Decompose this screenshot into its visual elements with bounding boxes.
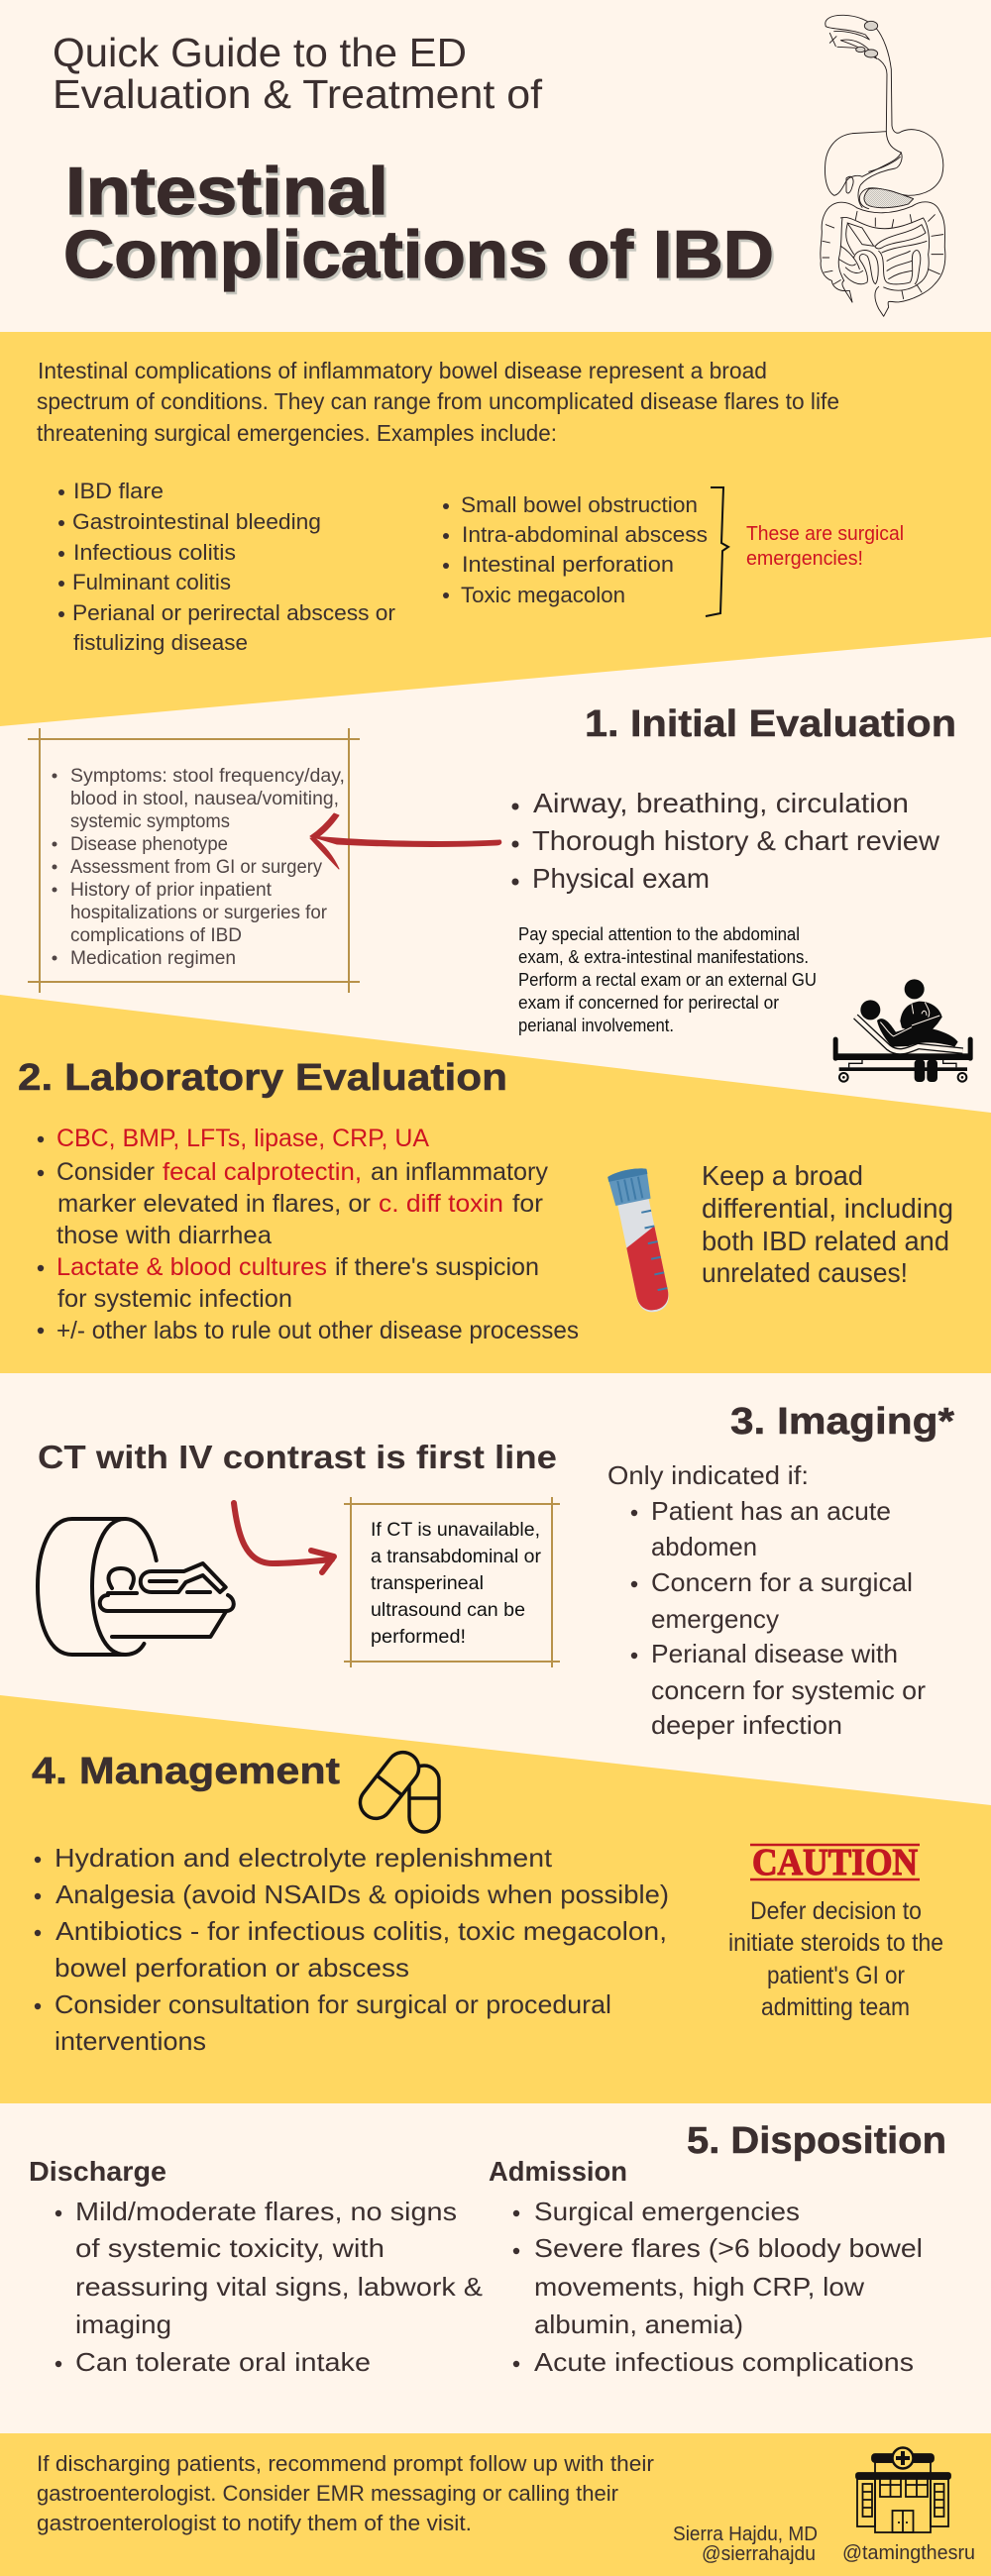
list: surgical emergencies: Toxic megacolon <box>461 583 625 607</box>
arrow <box>234 1503 334 1572</box>
list: labs: +/- other labs to rule out other disease processes <box>56 1317 579 1344</box>
list: management: Analgesia (avoid NSAIDs & opioids when possible) <box>55 1879 669 1909</box>
icon: hospital <box>856 2447 950 2532</box>
note: physical exam <box>518 924 817 1035</box>
list: surgical emergencies <box>443 492 708 607</box>
author credit <box>673 2523 818 2565</box>
alternative box: If CT is unavailable, <box>371 1519 540 1541</box>
list: labs <box>38 1125 579 1344</box>
note: physical exam: Pay special attention to the abdominal <box>518 924 800 944</box>
callout: broad differential: Keep a broad <box>702 1160 863 1191</box>
list: management: Consider consultation for surgical or procedural <box>55 1989 611 2019</box>
callout: broad differential: differential, including <box>702 1193 953 1224</box>
alternative box: performed! <box>371 1626 466 1648</box>
column: admission: Admission <box>489 2156 627 2187</box>
follow-up note: gastroenterologist. Consider EMR messaging or calling their <box>37 2481 618 2506</box>
list: imaging indications: emergency <box>651 1604 779 1634</box>
list: labs: marker elevated in flares, or <box>57 1190 371 1218</box>
list: labs: those with diarrhea <box>56 1222 272 1249</box>
list: management: Antibiotics - for infectious colitis, toxic megacolon, <box>55 1916 667 1946</box>
list: complications: Perianal or perirectal abscess or <box>72 600 395 625</box>
intro paragraph: Intestinal complications of inflammatory bowel disease represent a broad <box>38 358 767 383</box>
alternative box: ultrasound can be <box>371 1599 525 1621</box>
column: admission: Acute infectious complications <box>534 2347 914 2377</box>
list: labs: an inflammatory <box>371 1158 548 1186</box>
callout: caution: patient's GI or <box>767 1962 905 1989</box>
list: surgical emergencies: Intestinal perforation <box>462 552 674 577</box>
list: evaluation steps: Physical exam <box>532 863 710 894</box>
list: evaluation steps: Airway, breathing, circulation <box>533 788 909 818</box>
heading: 3. Imaging* <box>730 1401 954 1443</box>
list: complications: Fulminant colitis <box>72 570 231 594</box>
panel: initial evaluation <box>28 703 973 1082</box>
callout: surgical emergencies: emergencies! <box>746 548 863 570</box>
panel: imaging <box>38 1401 954 1740</box>
callout: caution: CAUTION <box>752 1842 918 1883</box>
history box: Disease phenotype <box>70 834 228 855</box>
intro paragraph: threatening surgical emergencies. Examples include: <box>37 420 557 446</box>
callout: caution: initiate steroids to the <box>728 1929 943 1957</box>
list: evaluation steps <box>511 788 940 894</box>
main title <box>63 154 774 292</box>
panel: footer <box>37 2447 975 2565</box>
list: labs: c. diff toxin <box>379 1190 503 1218</box>
callout: surgical emergencies <box>746 523 904 570</box>
panel: management <box>32 1746 943 2056</box>
history box: Medication regimen <box>70 948 236 969</box>
icon: doctor and patient <box>833 979 973 1082</box>
heading: 4. Management <box>32 1751 340 1792</box>
history box: blood in stool, nausea/vomiting, <box>70 789 339 809</box>
subtitle: Quick Guide to the ED <box>53 30 467 75</box>
callout: broad differential: unrelated causes! <box>702 1257 908 1288</box>
history box: hospitalizations or surgeries for <box>70 903 328 923</box>
list: management: Hydration and electrolyte replenishment <box>55 1843 553 1873</box>
callout: broad differential <box>702 1160 953 1288</box>
alternative box <box>344 1497 560 1667</box>
note: physical exam: Perform a rectal exam or an external GU <box>518 970 817 990</box>
column: discharge: imaging <box>75 2309 171 2339</box>
icon: pills <box>354 1746 439 1832</box>
list: complications: IBD flare <box>73 479 164 503</box>
column: admission <box>489 2156 923 2377</box>
panel: disposition <box>29 2120 946 2377</box>
column: admission: movements, high CRP, low <box>534 2272 864 2302</box>
list: labs: CBC, BMP, LFTs, lipase, CRP, UA <box>56 1125 429 1152</box>
icon: digestive system <box>821 15 945 316</box>
column: discharge: Can tolerate oral intake <box>75 2347 371 2377</box>
main title: Intestinal <box>65 154 388 229</box>
intro paragraph: spectrum of conditions. They can range from uncomplicated disease flares to life <box>37 388 839 414</box>
list: imaging indications: Only indicated if: <box>607 1460 809 1490</box>
list: labs: Consider <box>56 1158 155 1186</box>
author credit: @sierrahajdu <box>702 2543 816 2565</box>
list: imaging indications: Concern for a surgical <box>651 1567 913 1597</box>
intro paragraph <box>37 358 839 446</box>
list: management <box>35 1843 669 2056</box>
history box: systemic symptoms <box>70 811 230 832</box>
history box: complications of IBD <box>70 925 242 946</box>
note: physical exam: exam if concerned for perirectal or <box>518 993 779 1013</box>
list: complications <box>58 479 395 655</box>
handle: @tamingthesru <box>842 2542 975 2564</box>
alternative box: a transabdominal or <box>371 1546 541 1567</box>
list: surgical emergencies: Intra-abdominal abscess <box>462 522 708 547</box>
follow-up note <box>37 2451 654 2535</box>
list: imaging indications: Patient has an acute <box>651 1496 891 1526</box>
column: admission: Severe flares (>6 bloody bowel <box>534 2233 923 2263</box>
column: discharge <box>29 2156 483 2377</box>
history box <box>28 728 360 993</box>
subtitle <box>53 30 543 117</box>
subheading: CT first line: CT with IV contrast is first line <box>38 1439 557 1475</box>
history box: Symptoms: stool frequency/day, <box>70 766 345 787</box>
list: imaging indications: concern for systemic or <box>651 1675 926 1705</box>
list: imaging indications: abdomen <box>651 1532 757 1561</box>
callout: caution: Defer decision to <box>750 1897 922 1925</box>
author credit: Sierra Hajdu, MD <box>673 2523 818 2545</box>
list: evaluation steps: Thorough history & chart review <box>532 825 940 856</box>
alternative box: transperineal <box>371 1572 484 1594</box>
column: discharge: of systemic toxicity, with <box>75 2233 385 2263</box>
heading: 5. Disposition <box>687 2120 946 2162</box>
panel: intro <box>37 358 904 655</box>
history box: History of prior inpatient <box>70 880 273 901</box>
callout: caution: admitting team <box>761 1993 910 2021</box>
heading: 1. Initial Evaluation <box>585 703 956 745</box>
callout: broad differential: both IBD related and <box>702 1226 949 1256</box>
list: complications: fistulizing disease <box>73 630 248 655</box>
list: management: bowel perforation or abscess <box>55 1953 409 1983</box>
column: discharge: reassuring vital signs, labwork & <box>75 2272 483 2302</box>
column: admission: Surgical emergencies <box>534 2197 800 2226</box>
list: management: interventions <box>55 2026 206 2056</box>
list: labs: for systemic infection <box>57 1285 292 1313</box>
list: labs: if there's suspicion <box>335 1253 539 1281</box>
list: imaging indications <box>607 1460 926 1740</box>
list: surgical emergencies: Small bowel obstruction <box>461 492 698 517</box>
column: discharge: Discharge <box>29 2156 166 2187</box>
follow-up note: gastroenterologist to notify them of the visit. <box>37 2511 472 2535</box>
history box: Assessment from GI or surgery <box>70 857 322 878</box>
icon: brace <box>706 487 728 616</box>
list: labs: for <box>512 1190 543 1218</box>
column: discharge: Mild/moderate flares, no signs <box>75 2197 457 2226</box>
list: labs: Lactate & blood cultures <box>56 1253 327 1281</box>
subtitle: Evaluation & Treatment of <box>53 71 543 117</box>
main title: Complications of IBD <box>63 217 774 292</box>
note: physical exam: exam, & extra-intestinal manifestations. <box>518 947 809 967</box>
list: complications: Gastrointestinal bleeding <box>72 509 321 534</box>
list: complications: Infectious colitis <box>73 540 236 565</box>
title block <box>53 30 774 292</box>
panel: laboratory evaluation <box>18 1057 953 1344</box>
arrow <box>310 813 501 869</box>
follow-up note: If discharging patients, recommend prompt follow up with their <box>37 2451 654 2476</box>
list: imaging indications: deeper infection <box>651 1710 842 1740</box>
callout: surgical emergencies: These are surgical <box>746 523 904 545</box>
icon: CT scanner <box>38 1519 234 1655</box>
column: admission: albumin, anemia) <box>534 2309 743 2339</box>
note: physical exam: perianal involvement. <box>518 1016 674 1035</box>
callout: caution <box>728 1842 943 2021</box>
list: imaging indications: Perianal disease with <box>651 1639 898 1668</box>
heading: 2. Laboratory Evaluation <box>18 1057 507 1099</box>
list: labs: fecal calprotectin, <box>163 1158 362 1186</box>
icon: blood tube <box>607 1166 676 1316</box>
